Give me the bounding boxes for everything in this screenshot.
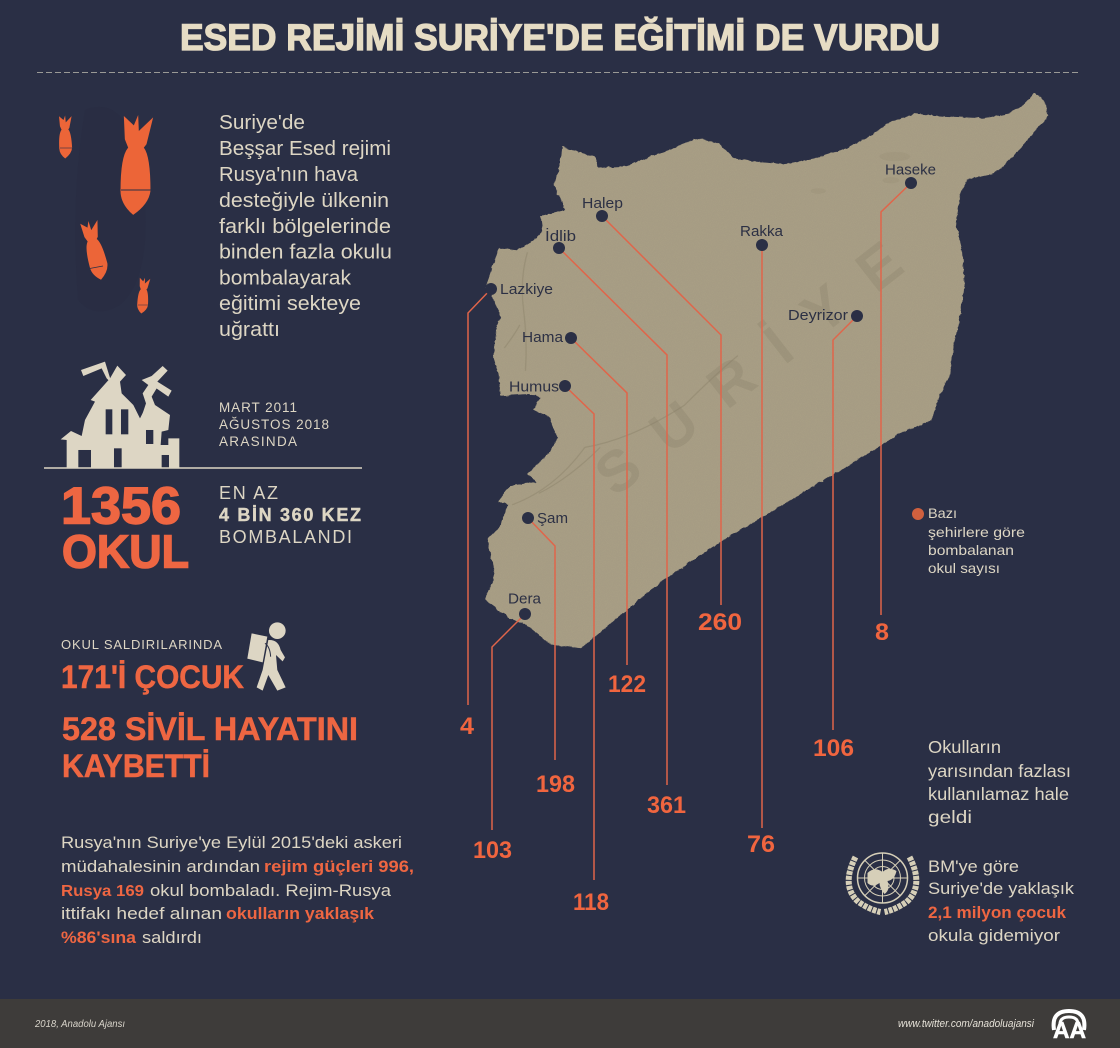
- paragraph: russia and regime attacks: okul bombaladı. Rejim-Rusya: [150, 881, 392, 900]
- city markers: [485, 177, 917, 620]
- paragraph: russia and regime attacks: Rusya 169: [61, 883, 144, 900]
- date range: AĞUSTOS 2018: [219, 417, 329, 432]
- city labels: İdlib: [545, 227, 576, 245]
- legend: [912, 505, 1025, 576]
- school counts per city: 4: [460, 713, 475, 740]
- intro text: bombalayarak: [219, 268, 352, 290]
- intro text: binden fazla okulu: [219, 242, 392, 264]
- casualties figures: KAYBETTİ: [62, 748, 210, 784]
- school counts per city: 361: [647, 792, 686, 819]
- title: ESED REJİMİ SURİYE'DE EĞİTİMİ DE VURDU: [180, 17, 940, 58]
- icon: UN emblem: [849, 853, 916, 912]
- intro text: eğitimi sekteye: [219, 293, 361, 315]
- city labels: Şam: [537, 510, 568, 527]
- map of syria: SURİYE: [583, 229, 915, 508]
- casualties figures: 171'İ ÇOCUK: [61, 659, 244, 695]
- footer link: www.twitter.com/anadoluajansi: [898, 1018, 1034, 1030]
- intro text: uğrattı: [219, 319, 280, 341]
- casualties figures: [61, 659, 358, 784]
- city labels: Rakka: [740, 223, 784, 240]
- school counts per city: 103: [473, 837, 512, 864]
- big number: 1356 okul: 1356: [61, 478, 181, 536]
- intro text: farklı bölgelerinde: [219, 216, 391, 238]
- text: schools unusable: [928, 737, 1071, 827]
- intro text: Suriye'de: [219, 112, 305, 134]
- footer bar: [0, 999, 1120, 1048]
- icon: destroyed school: [61, 362, 179, 468]
- intro text: Beşşar Esed rejimi: [219, 138, 391, 160]
- bombing count: EN AZ: [219, 483, 278, 503]
- paragraph: russia and regime attacks: rejim güçleri 996,: [264, 857, 414, 876]
- school counts per city: 8: [875, 619, 889, 646]
- footer credit: 2018, Anadolu Ajansı: [34, 1019, 125, 1030]
- school counts per city: 76: [747, 831, 775, 858]
- city labels: Deyrizor: [788, 307, 848, 324]
- paragraph: russia and regime attacks: müdahalesinin ardından: [61, 857, 260, 876]
- city labels: Haseke: [885, 162, 936, 178]
- school counts per city: 198: [536, 771, 575, 798]
- text: un statistic: 2,1 milyon çocuk: [928, 903, 1067, 922]
- paragraph: russia and regime attacks: ittifakı hedef alınan: [61, 904, 222, 923]
- intro text: desteğiyle ülkenin: [219, 190, 389, 212]
- paragraph: russia and regime attacks: okulların yaklaşık: [226, 904, 375, 923]
- school counts per city: 118: [573, 889, 609, 916]
- city labels: Hama: [522, 329, 564, 346]
- icon: child with backpack: [247, 622, 286, 691]
- casualties figures: 528 SİVİL HAYATINI: [62, 711, 358, 747]
- big number: 1356 okul: OKUL: [62, 526, 189, 578]
- text: un statistic: BM'ye göre: [928, 857, 1019, 876]
- text: un statistic: okula gidemiyor: [928, 926, 1060, 945]
- city labels: Halep: [582, 195, 623, 212]
- paragraph: russia and regime attacks: Rusya'nın Suriye'ye Eylül 2015'deki askeri: [61, 833, 402, 852]
- text: schools unusable: yarısından fazlası: [928, 761, 1071, 781]
- connector lines: [468, 183, 911, 880]
- date range: ARASINDA: [219, 434, 297, 449]
- legend: şehirlere göre: [928, 524, 1025, 540]
- text: un statistic: [928, 857, 1075, 945]
- bombing count: BOMBALANDI: [219, 527, 352, 547]
- city labels: Lazkiye: [500, 281, 553, 298]
- legend: Bazı: [928, 505, 957, 521]
- map of syria: [485, 93, 1048, 648]
- intro text: [219, 112, 392, 341]
- logo: anadolu agency: AA: [1053, 1017, 1086, 1043]
- date range: [219, 400, 329, 449]
- bombing count: [219, 483, 361, 547]
- bombing count: 4 BİN 360 KEZ: [219, 505, 361, 525]
- school counts per city: 122: [608, 671, 646, 698]
- school counts per city: 106: [813, 735, 854, 762]
- text: schools unusable: geldi: [928, 807, 972, 827]
- icon: falling bombs: [58, 107, 153, 314]
- city labels: Humus: [509, 378, 559, 396]
- legend: okul sayısı: [928, 560, 1000, 576]
- date range: MART 2011: [219, 400, 297, 415]
- big number: 1356 okul: [61, 478, 189, 578]
- city labels: [500, 162, 936, 608]
- legend: bombalanan: [928, 542, 1014, 558]
- casualties heading: OKUL SALDIRILARINDA: [61, 637, 222, 652]
- text: schools unusable: kullanılamaz hale: [928, 784, 1069, 804]
- intro text: Rusya'nın hava: [219, 164, 359, 186]
- text: schools unusable: Okulların: [928, 737, 1001, 757]
- city labels: Dera: [508, 590, 542, 608]
- paragraph: russia and regime attacks: [61, 833, 414, 947]
- paragraph: russia and regime attacks: saldırdı: [142, 928, 202, 947]
- school counts per city: [460, 609, 889, 916]
- paragraph: russia and regime attacks: %86'sına: [61, 928, 137, 947]
- text: un statistic: Suriye'de yaklaşık: [928, 879, 1075, 898]
- school counts per city: 260: [698, 609, 742, 636]
